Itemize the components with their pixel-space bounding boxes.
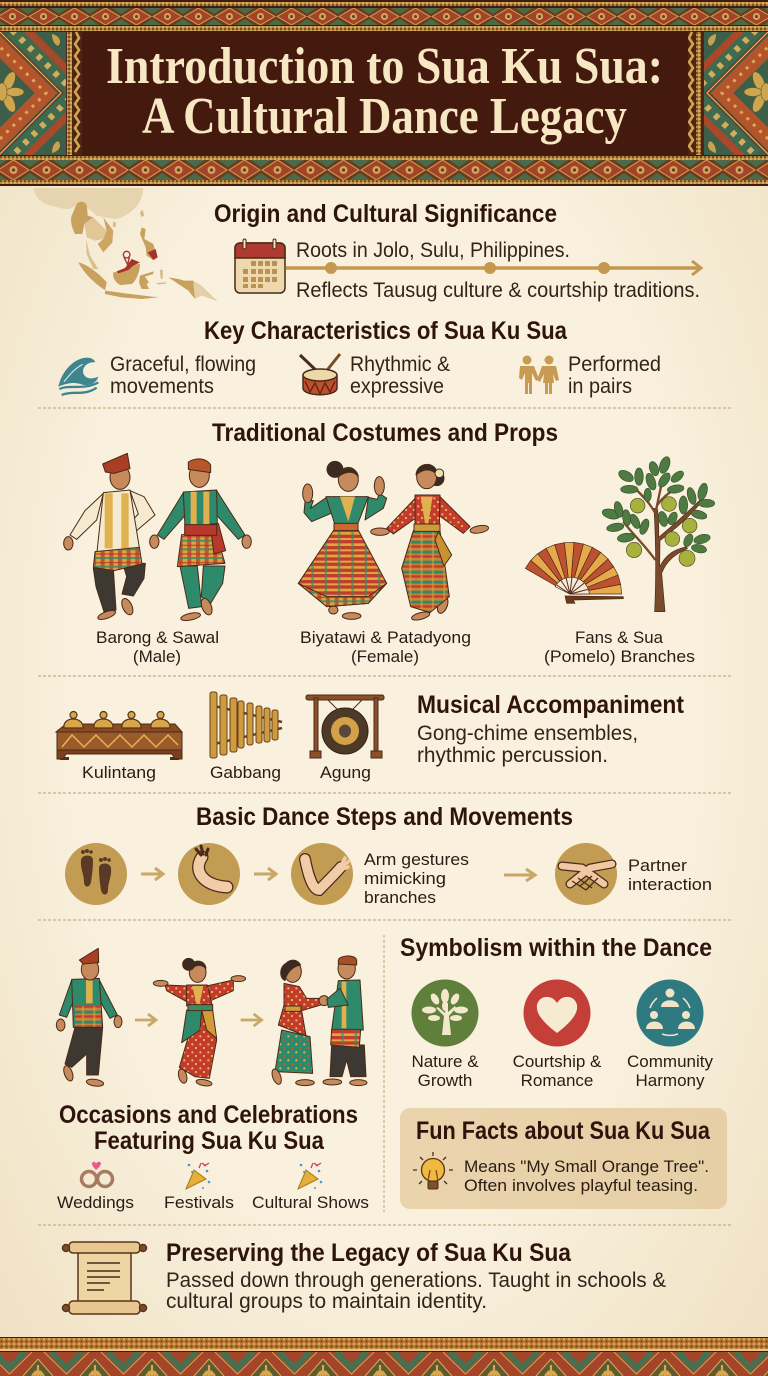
- label: gabbang: Gabbang: [210, 763, 281, 782]
- female dancer in red blouse: [371, 464, 489, 622]
- heading: occasions and celebrations: Occasions and Celebrations: [59, 1101, 358, 1129]
- label: courtship and romance: [513, 1052, 602, 1090]
- heading: preserving the legacy: Preserving the Legacy of Sua Ku Sua: [166, 1239, 572, 1267]
- figures: male and female costumes: [64, 453, 489, 622]
- text: partner interaction: [628, 856, 712, 894]
- icon: calendar: [235, 239, 285, 293]
- text: pairs: in pairs: [568, 375, 632, 398]
- step: arm gestures: [291, 843, 353, 905]
- heading: occasions and celebrations: Featuring Sua Ku Sua: [94, 1127, 325, 1155]
- text: partner interaction: interaction: [628, 875, 712, 894]
- text: origin: Roots in Jolo, Sulu, Philippines.: [296, 239, 570, 262]
- heading: dance steps: Basic Dance Steps and Movements: [196, 803, 573, 831]
- dancers: couple holding hands: [270, 956, 367, 1086]
- label: courtship and romance: Romance: [521, 1071, 593, 1090]
- arrow: [135, 1014, 156, 1026]
- heading: fun facts: Fun Facts about Sua Ku Sua: [416, 1117, 711, 1145]
- label: nature and growth: Growth: [418, 1071, 472, 1090]
- text: musical accompaniment: [417, 722, 638, 767]
- heading: musical accompaniment: Musical Accompaniment: [417, 691, 685, 719]
- text: rhythmic: [350, 353, 450, 398]
- text: fun facts: Means "My Small Orange Tree".: [464, 1157, 709, 1176]
- labels: occasions: Cultural Shows: [252, 1193, 369, 1212]
- arrow: [141, 868, 163, 880]
- text: arm gestures: Arm gestures: [364, 850, 469, 869]
- step: raised arm: [178, 843, 240, 905]
- labels: occasions: Festivals: [164, 1193, 234, 1212]
- illustration: dance sequence: [56, 948, 367, 1087]
- icon: pair of dancers: [519, 356, 559, 394]
- title banner: [82, 32, 688, 155]
- heading: symbolism: Symbolism within the Dance: [400, 934, 712, 962]
- arrow: [241, 1014, 262, 1026]
- text: arm gestures: mimicking: [364, 869, 446, 888]
- bottom decorative border: [0, 1337, 768, 1376]
- text: arm gestures: branches: [364, 888, 436, 907]
- instrument: agung gong: [306, 695, 384, 758]
- text: rhythmic: expressive: [350, 375, 444, 398]
- text: preserving the legacy: Passed down through generations. Taught in schools &: [166, 1269, 666, 1292]
- text: culture: Reflects Tausug culture & courtship traditions.: [296, 279, 700, 302]
- male dancer in green: [150, 459, 251, 622]
- illustration: fan and pomelo branch: [525, 455, 715, 612]
- dancer: walking man: [56, 948, 122, 1087]
- text: preserving the legacy: cultural groups to maintain identity.: [166, 1290, 487, 1313]
- heading: costumes and props: Traditional Costumes and Props: [212, 419, 558, 447]
- captions: costumes: Fans & Sua: [575, 628, 664, 647]
- captions: costumes: Biyatawi & Patadyong: [300, 628, 471, 647]
- step: footsteps: [65, 843, 127, 905]
- captions: costumes: [96, 628, 695, 666]
- label: courtship and romance: Courtship &: [513, 1052, 602, 1071]
- label: community harmony: Community: [627, 1052, 713, 1071]
- arrow: [504, 869, 535, 881]
- dancer: woman with open arms: [153, 958, 246, 1087]
- text: pairs: Performed: [568, 353, 661, 376]
- text: fun facts: [464, 1157, 709, 1195]
- text: musical accompaniment: rhythmic percussion.: [417, 744, 608, 767]
- heading: origin and cultural significance: Origin and Cultural Significance: [214, 200, 557, 228]
- map of Southeast Asia: [33, 188, 218, 301]
- text: fun facts: Often involves playful teasing.: [464, 1176, 698, 1195]
- text: musical accompaniment: Gong-chime ensembles,: [417, 722, 638, 745]
- icon: nature and growth: [412, 980, 478, 1046]
- instrument: gabbang: [210, 692, 282, 758]
- text: rhythmic: Rhythmic &: [350, 353, 450, 376]
- top decorative border: [0, 0, 768, 186]
- captions: costumes: Barong & Sawal: [96, 628, 219, 647]
- text: pairs: [568, 353, 661, 398]
- male dancer in barong: [64, 453, 155, 621]
- text: arm gestures: [364, 850, 469, 907]
- icon: scroll: [62, 1242, 146, 1314]
- icon: community harmony: [636, 980, 704, 1046]
- timeline arrow: [286, 261, 701, 275]
- icon: drum: [300, 354, 340, 395]
- icon: courtship and romance: [524, 980, 590, 1046]
- labels: occasions: Weddings: [57, 1193, 134, 1212]
- label: community harmony: Harmony: [636, 1071, 705, 1090]
- icon: wave: [58, 358, 98, 395]
- instrument: kulintang: [56, 712, 182, 760]
- captions: costumes: (Male): [133, 647, 181, 666]
- female dancer in green blouse: [298, 461, 387, 619]
- heading: occasions and celebrations: [59, 1101, 358, 1155]
- label: agung: Agung: [320, 763, 371, 782]
- text: preserving the legacy: [166, 1269, 666, 1313]
- text: partner interaction: Partner: [628, 856, 687, 875]
- text: graceful: movements: [110, 375, 214, 398]
- heading: key characteristics: Key Characteristics of Sua Ku Sua: [204, 317, 568, 345]
- label: nature and growth: Nature &: [411, 1052, 479, 1071]
- label: nature and growth: [411, 1052, 479, 1090]
- arrow: [254, 868, 276, 880]
- label: kulintang: Kulintang: [82, 763, 156, 782]
- panel: fun facts: [400, 1108, 727, 1209]
- captions: costumes: (Pomelo) Branches: [544, 647, 695, 666]
- text: graceful: Graceful, flowing: [110, 353, 256, 376]
- labels: occasions: [57, 1193, 369, 1212]
- icon: party popper: [298, 1163, 322, 1189]
- icon: fan: [525, 542, 623, 603]
- captions: costumes: (Female): [351, 647, 419, 666]
- icon: light bulb: [413, 1152, 453, 1189]
- label: community harmony: [627, 1052, 713, 1090]
- text: graceful: [110, 353, 256, 398]
- step: partner handshake: [555, 843, 617, 905]
- icon: party popper: [186, 1163, 210, 1189]
- icon: wedding rings: [82, 1162, 112, 1186]
- title banner: A Cultural Dance Legacy: [142, 88, 627, 145]
- icon: pomelo tree: [601, 455, 715, 612]
- title banner: Introduction to Sua Ku Sua:: [106, 38, 663, 95]
